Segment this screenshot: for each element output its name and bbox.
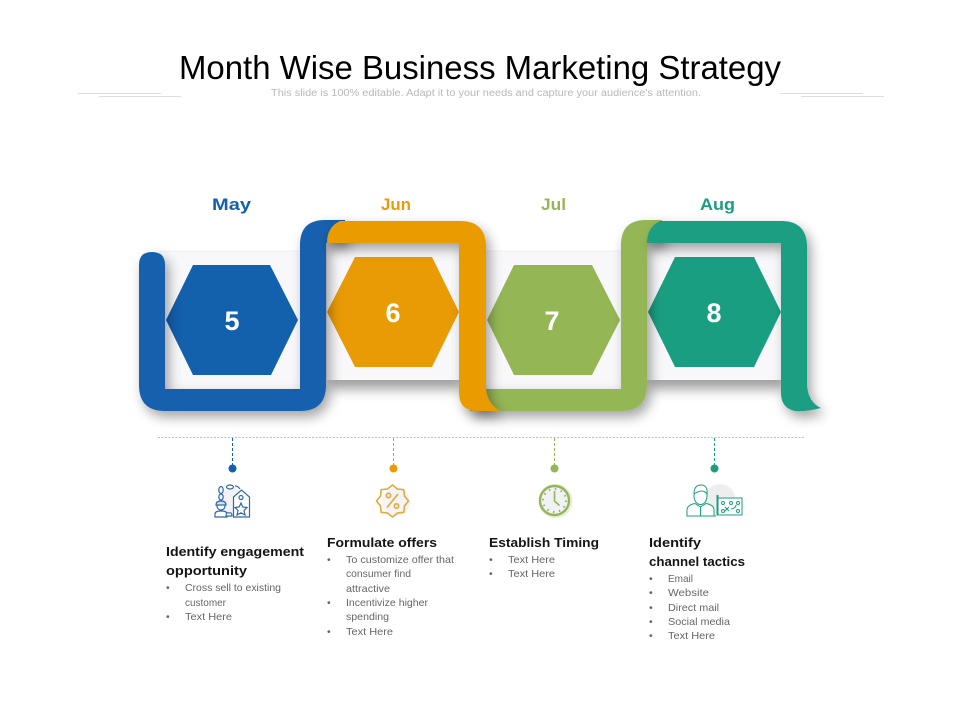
ribbon: blue bbox=[139, 220, 345, 411]
divider line bbox=[158, 436, 804, 438]
connector: May bbox=[228, 438, 236, 472]
month labels: Jul bbox=[541, 195, 566, 214]
text block: Formulate offers: • bbox=[327, 626, 331, 638]
text block: Identify channel tactics: Text Here bbox=[668, 630, 715, 642]
text block: Identify channel tactics bbox=[649, 535, 745, 642]
text block: Identify channel tactics: • bbox=[649, 587, 653, 599]
text block: Establish Timing: Establish Timing bbox=[489, 535, 599, 550]
text block: Identify channel tactics: Social media bbox=[668, 616, 730, 628]
text block: Identify engagement opportunity: Cross sell to existing bbox=[185, 582, 281, 594]
text block: Establish Timing: Text Here bbox=[508, 554, 555, 566]
panel: May background bbox=[160, 251, 305, 391]
text block: Formulate offers: • bbox=[327, 554, 331, 566]
hexagon 6 bbox=[327, 257, 459, 367]
text block: Formulate offers: attractive bbox=[346, 583, 390, 595]
text block: Establish Timing: Text Here bbox=[508, 568, 555, 580]
text block: Identify channel tactics: • bbox=[649, 616, 653, 628]
text block: Establish Timing bbox=[489, 535, 599, 580]
text block: Identify channel tactics: Website bbox=[668, 587, 709, 599]
title: Month Wise Business Marketing Strategy bbox=[179, 49, 781, 86]
panel: Aug background bbox=[647, 240, 783, 380]
text block: Identify engagement opportunity: • bbox=[166, 582, 170, 594]
connector: Jun bbox=[390, 438, 398, 472]
text block: Establish Timing: • bbox=[489, 554, 493, 566]
text block: Formulate offers: Text Here bbox=[346, 626, 393, 638]
text block: Formulate offers: consumer find bbox=[346, 568, 411, 580]
ribbon: teal bbox=[647, 221, 821, 411]
text block: Formulate offers: spending bbox=[346, 611, 389, 623]
text block: Identify channel tactics: • bbox=[649, 573, 653, 585]
subtitle: This slide is 100% editable. Adapt it to your needs and capture your audience's attention. bbox=[271, 88, 701, 99]
hexagon 7: 7 bbox=[544, 306, 560, 336]
text block: Identify engagement opportunity: opportunity bbox=[166, 563, 248, 578]
hexagon 5: 5 bbox=[224, 306, 240, 336]
hexagon 7 bbox=[487, 265, 620, 375]
icon: person with tactics board bbox=[687, 484, 742, 516]
hexagon 8 bbox=[648, 257, 781, 367]
ribbon: green bbox=[470, 220, 662, 411]
text block: Identify engagement opportunity: customer bbox=[185, 597, 226, 609]
icon: discount badge bbox=[376, 485, 410, 517]
connector: Jul bbox=[550, 438, 558, 472]
text block: Formulate offers bbox=[327, 535, 454, 638]
text block: Formulate offers: To customize offer that bbox=[346, 554, 454, 566]
text block: Establish Timing: • bbox=[489, 568, 493, 580]
text block: Formulate offers: • bbox=[327, 597, 331, 609]
month labels: May bbox=[212, 195, 252, 214]
hexagon 8: 8 bbox=[706, 298, 722, 328]
hexagon 5 bbox=[166, 265, 298, 375]
month labels: Aug bbox=[700, 195, 735, 214]
hexagon 6: 6 bbox=[385, 298, 401, 328]
panel: Jun background bbox=[327, 240, 461, 380]
text block: Identify engagement opportunity: Text Here bbox=[185, 611, 232, 623]
panel: Jul background bbox=[480, 251, 625, 391]
icon: clock bbox=[540, 485, 572, 517]
text block: Identify channel tactics: Direct mail bbox=[668, 602, 719, 614]
month labels bbox=[212, 195, 735, 214]
text block: Identify channel tactics: • bbox=[649, 630, 653, 642]
ribbon: orange bbox=[327, 221, 500, 411]
month labels: Jun bbox=[381, 195, 411, 214]
text block: Identify channel tactics: Email bbox=[668, 573, 693, 585]
text block: Identify channel tactics: • bbox=[649, 602, 653, 614]
text block: Formulate offers: Incentivize higher bbox=[346, 597, 428, 609]
text block: Identify engagement opportunity: Identify engagement bbox=[166, 544, 305, 559]
text block: Identify engagement opportunity bbox=[166, 544, 305, 623]
text block: Identify engagement opportunity: • bbox=[166, 611, 170, 623]
icon: engagement tag and person bbox=[215, 485, 250, 517]
text block: Formulate offers: Formulate offers bbox=[327, 535, 437, 550]
text block: Identify channel tactics: channel tactics bbox=[649, 554, 745, 569]
connector: Aug bbox=[710, 438, 718, 472]
text block: Identify channel tactics: Identify bbox=[649, 535, 702, 550]
